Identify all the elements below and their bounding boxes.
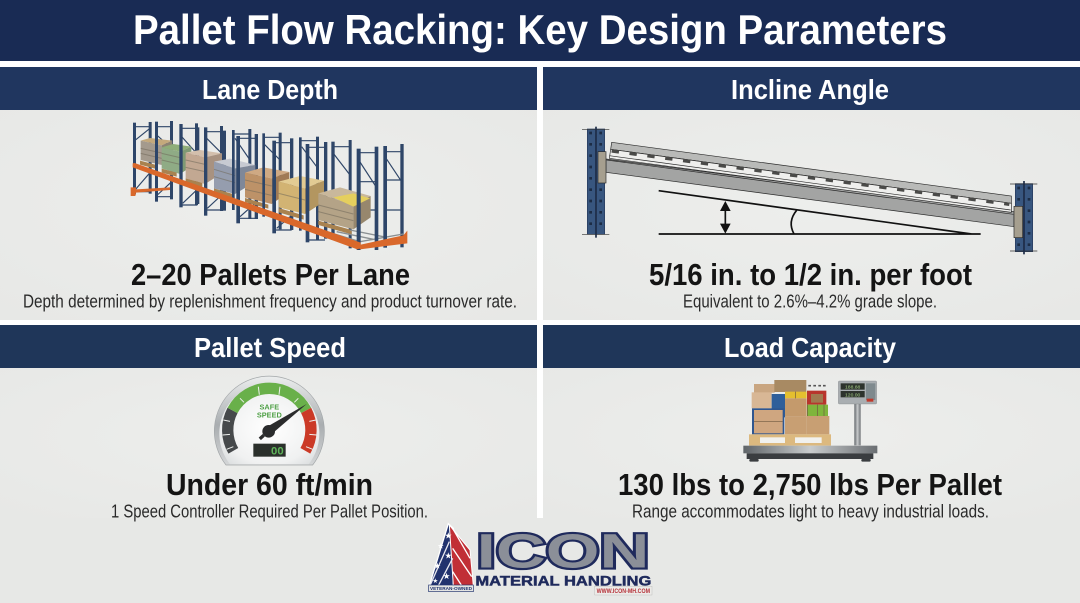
- heading: lane depth: Lane Depth: [202, 74, 338, 105]
- back uprights: [149, 121, 404, 248]
- heading: load capacity: Load Capacity: [724, 332, 896, 363]
- website tag: WWW.ICON-MH.COM: [597, 588, 650, 595]
- heading: pallet speed: Pallet Speed: [194, 332, 346, 363]
- wooden pallet: [749, 434, 831, 446]
- logo emblem: ★: [444, 550, 452, 560]
- heading: incline angle: Incline Angle: [731, 74, 889, 105]
- icon: pallet on scale: [743, 380, 877, 462]
- left upright: [582, 127, 609, 238]
- value: pallets per lane: 2–20 Pallets Per Lane: [131, 257, 410, 292]
- logo emblem: ★: [444, 530, 452, 540]
- orange beam: [131, 163, 407, 249]
- angle diagram: [659, 191, 981, 234]
- right upright: [1010, 181, 1037, 254]
- title banner: [0, 0, 1080, 61]
- logo emblem: [429, 524, 473, 586]
- value: speed limit: Under 60 ft/min: [166, 467, 373, 502]
- description: grade slope: Equivalent to 2.6%–4.2% grade slope.: [683, 292, 937, 312]
- panel: lane depth: [0, 67, 537, 312]
- material handling wordmark: MATERIAL HANDLING: [475, 572, 651, 588]
- heading: load capacity: [543, 325, 1080, 368]
- scale post and head: [838, 381, 877, 445]
- needle: [259, 404, 307, 440]
- icon: speed gauge: SPEED: [257, 410, 282, 419]
- wire mesh deck: [323, 230, 403, 242]
- description: speed controller: 1 Speed Controller Required Per Pallet Position.: [111, 502, 428, 522]
- logo emblem: ★: [437, 541, 444, 550]
- heading: pallet speed: [0, 325, 537, 368]
- pallet loads: [140, 138, 371, 234]
- title banner: Pallet Flow Racking: Key Design Parameters: [133, 6, 947, 53]
- logo emblem: ★: [432, 577, 438, 585]
- front uprights: [133, 122, 387, 250]
- scale post and head: 188.88: [845, 385, 861, 391]
- heading: incline angle: [543, 67, 1080, 110]
- icon: incline rail diagram: [582, 127, 1037, 254]
- digital readout: 00: [271, 445, 284, 457]
- logo: ICON Material Handling: [429, 524, 652, 595]
- safe speed label: SAFE: [260, 402, 279, 411]
- gauge arcs: [228, 388, 311, 451]
- panel: pallet speed: [0, 325, 537, 522]
- ICON wordmark: ICON: [477, 525, 649, 579]
- website tag: [595, 586, 652, 595]
- veteran-owned tag: VETERAN-OWNED: [430, 586, 472, 592]
- sloped rail: [598, 142, 1023, 238]
- panel: load capacity: [543, 325, 1080, 522]
- heading: lane depth: [0, 67, 537, 110]
- logo emblem: ★: [443, 571, 451, 581]
- panel: incline angle: [543, 67, 1080, 312]
- value: load range: 130 lbs to 2,750 lbs Per Pallet: [618, 467, 1002, 502]
- boxes: [752, 380, 829, 434]
- icon: speed gauge: [214, 376, 324, 465]
- icon: pallet rack lane: [131, 121, 407, 250]
- description: lane depth: Depth determined by replenishment frequency and product turnover rate.: [23, 292, 517, 312]
- logo emblem: ★: [434, 561, 441, 570]
- description: load range: Range accommodates light to heavy industrial loads.: [632, 502, 989, 522]
- scale platform: [743, 446, 877, 462]
- scale post and head: 120.00: [845, 392, 861, 398]
- value: slope per foot: 5/16 in. to 1/2 in. per foot: [649, 257, 972, 292]
